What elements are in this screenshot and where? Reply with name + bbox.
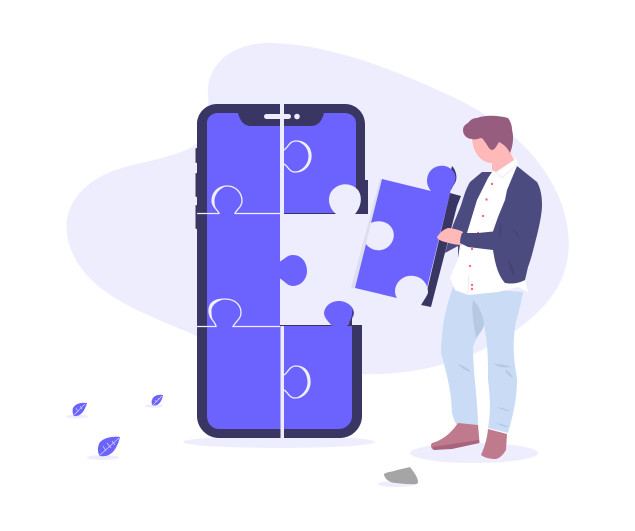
man ground shadow [410, 443, 538, 463]
hand [437, 228, 463, 245]
knob crescents [209, 141, 311, 398]
hair [463, 116, 513, 153]
leaf bottom [87, 437, 120, 460]
piece shadow edge [351, 179, 382, 288]
shirt buttons [469, 183, 493, 290]
dark bit beside lower knob [348, 309, 354, 325]
jacket right [490, 166, 542, 284]
left shoe sole [432, 440, 480, 450]
seam and knob outlines [197, 141, 311, 398]
phone screen [207, 113, 356, 429]
man [431, 116, 542, 459]
leaf left [66, 403, 88, 418]
piece lower hole [395, 276, 428, 305]
piece dark side [421, 193, 461, 307]
pants [441, 287, 523, 433]
collar lines and placket [468, 165, 516, 295]
vertical seam [280, 104, 284, 214]
phone frame bottom [197, 210, 362, 438]
purple knob up from lower right piece [284, 301, 354, 340]
face [472, 136, 510, 163]
rock [384, 467, 418, 484]
left shoe [431, 423, 480, 450]
purple knob into slot [279, 255, 307, 286]
rock shadow [378, 481, 414, 487]
phone [196, 104, 369, 438]
jacket left [445, 172, 492, 258]
side buttons [196, 148, 198, 229]
sleeve [460, 231, 515, 255]
speaker and camera [264, 114, 300, 119]
shirt [450, 158, 528, 295]
piece body [355, 166, 456, 298]
background blob [67, 43, 569, 374]
pants folds [458, 300, 513, 427]
neck [492, 150, 514, 172]
piece knob dark edge [447, 166, 456, 190]
phone frame top [197, 104, 368, 215]
missing puzzle slot [280, 184, 369, 325]
right shoe [481, 429, 507, 459]
held puzzle piece [351, 166, 461, 307]
leaf right [145, 395, 163, 408]
phone shadow [183, 436, 375, 448]
jacket folds [499, 222, 519, 277]
